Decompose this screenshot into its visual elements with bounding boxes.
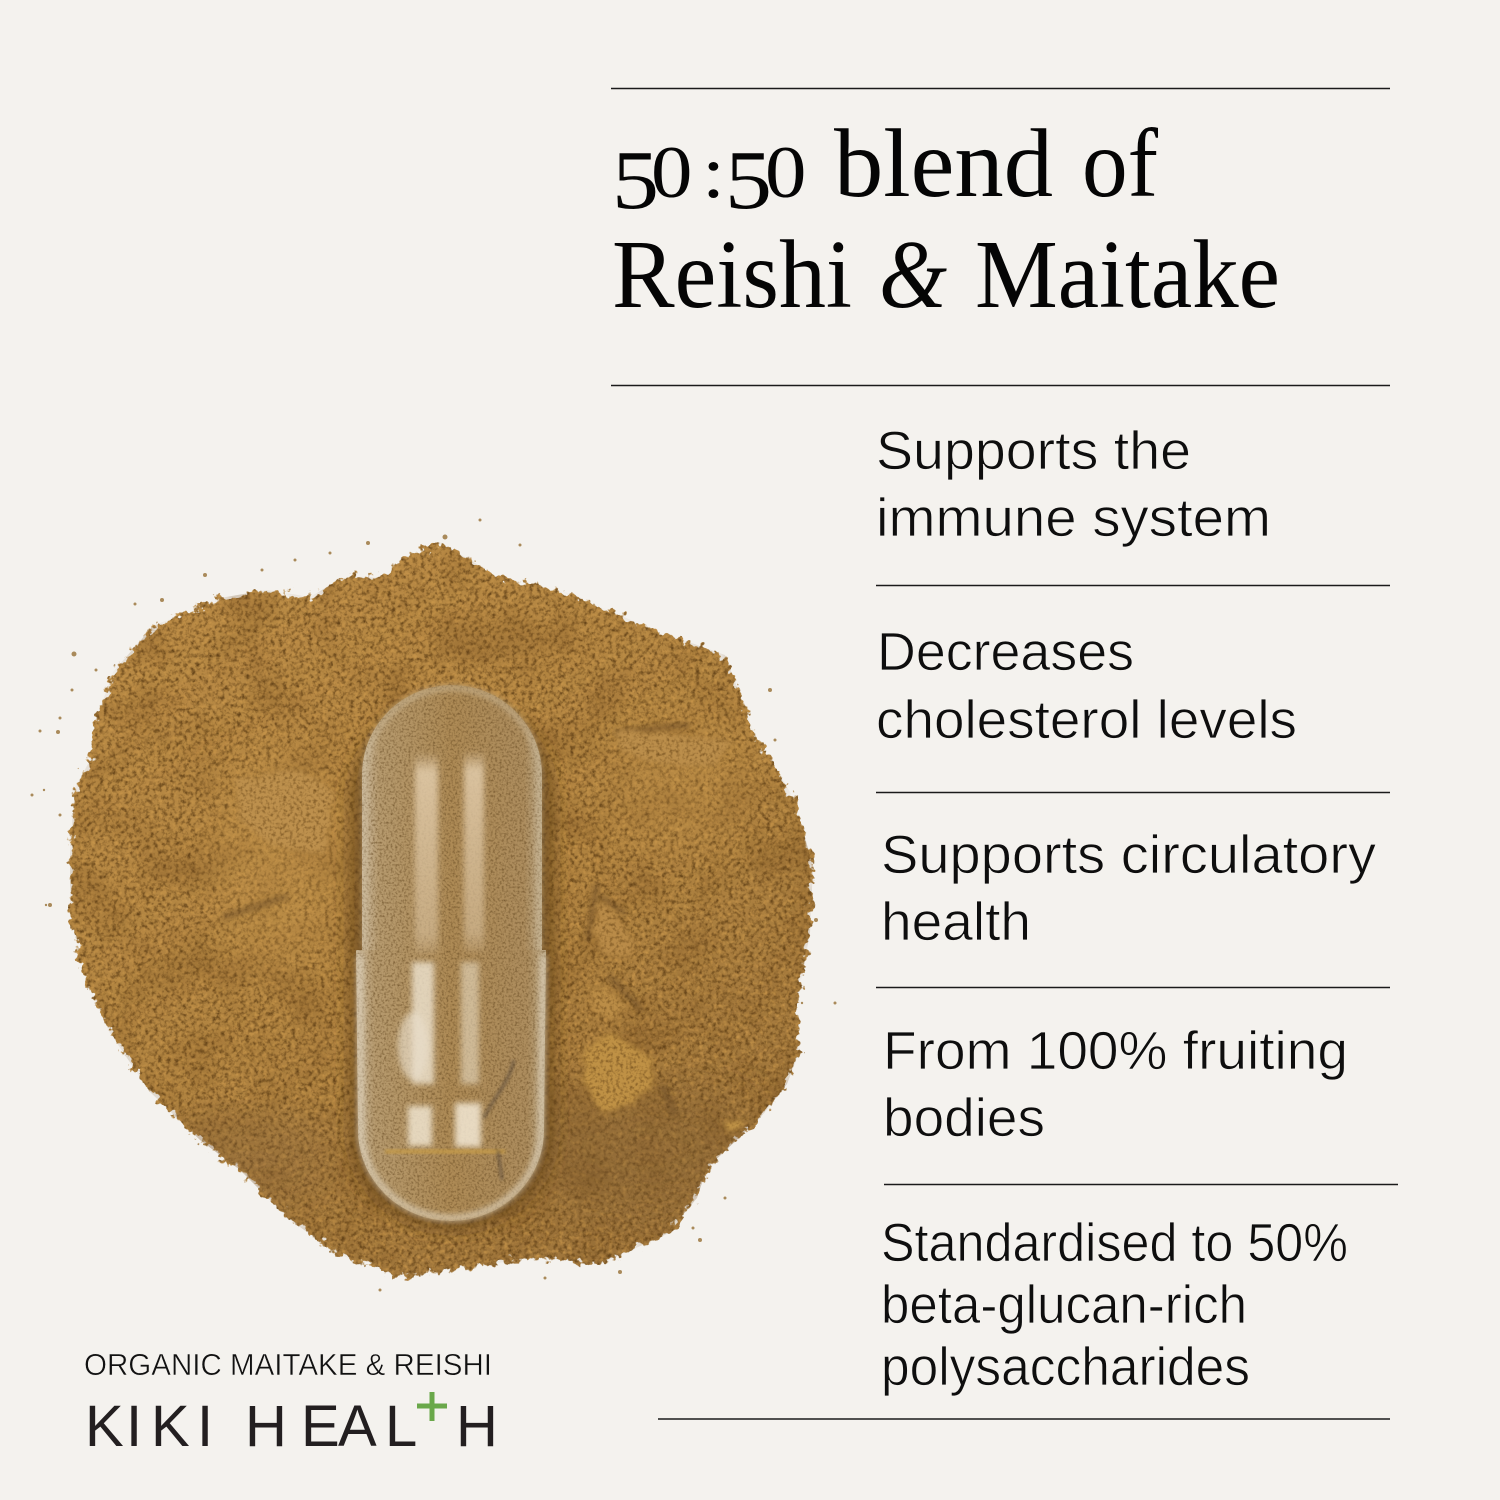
brand block [84, 1347, 498, 1459]
title: Maitake [975, 221, 1280, 329]
benefit: immune [876, 421, 1271, 548]
capsule seam [356, 952, 546, 954]
benefit: beta-glucan: polysaccharides [881, 1337, 1250, 1397]
capsule lower shell [356, 950, 546, 1221]
benefit: circulatory: health [881, 892, 1031, 952]
capsule band of powder [385, 1149, 505, 1154]
benefit: beta-glucan: beta-glucan-rich [881, 1275, 1247, 1335]
divider lines [611, 88, 1398, 1419]
benefit: circulatory [881, 825, 1376, 952]
capsule dark fleck [484, 1060, 514, 1180]
powder clumps [236, 730, 745, 1132]
title: & [879, 221, 947, 329]
title: 0 [765, 131, 806, 213]
logo: H [456, 1394, 498, 1459]
benefit: cholesterol: Decreases [877, 622, 1134, 682]
benefit: cholesterol: cholesterol levels [876, 690, 1297, 750]
logo: I [197, 1394, 213, 1459]
title: Reishi [612, 221, 852, 329]
powder pile with capsule photo [30, 518, 836, 1292]
scattered powder specks [30, 518, 836, 1292]
capsule rim highlight [365, 688, 539, 950]
benefit: fruiting bodies: bodies [883, 1088, 1045, 1148]
title: 5 [725, 135, 772, 227]
logo: K [151, 1394, 190, 1459]
logo plus icon [417, 1392, 447, 1421]
benefit: cholesterol [876, 622, 1297, 750]
logo: H [245, 1394, 287, 1459]
soft shading on the mound [60, 530, 830, 1290]
capsule upper shell [362, 685, 542, 955]
logo: A [338, 1394, 377, 1459]
logo: I [126, 1394, 142, 1459]
title: 0 [651, 131, 692, 213]
benefit: circulatory: Supports circulatory [881, 825, 1376, 885]
logo [85, 1392, 498, 1459]
title: blend [834, 110, 1053, 218]
product subtitle: ORGANIC MAITAKE & REISHI [84, 1347, 492, 1382]
capsule shadow [349, 700, 555, 1230]
title: : [702, 131, 725, 213]
benefit: fruiting bodies [883, 1021, 1348, 1148]
powder mound [60, 530, 830, 1290]
logo: K [85, 1394, 124, 1459]
title [612, 110, 1280, 329]
benefit: beta-glucan: Standardised to 50% [881, 1213, 1348, 1273]
title: 5 [612, 135, 659, 227]
benefit: fruiting bodies: From 100% fruiting [883, 1021, 1348, 1081]
logo: L [385, 1394, 417, 1459]
benefit: immune: Supports the [876, 421, 1191, 481]
benefit: beta-glucan [881, 1213, 1348, 1397]
title: of [1082, 110, 1158, 218]
capsule [356, 685, 546, 1221]
crevices between clumps [222, 725, 690, 1118]
benefit: immune: immune system [876, 488, 1271, 548]
capsule reflections [398, 750, 484, 1147]
logo: E [301, 1394, 340, 1459]
